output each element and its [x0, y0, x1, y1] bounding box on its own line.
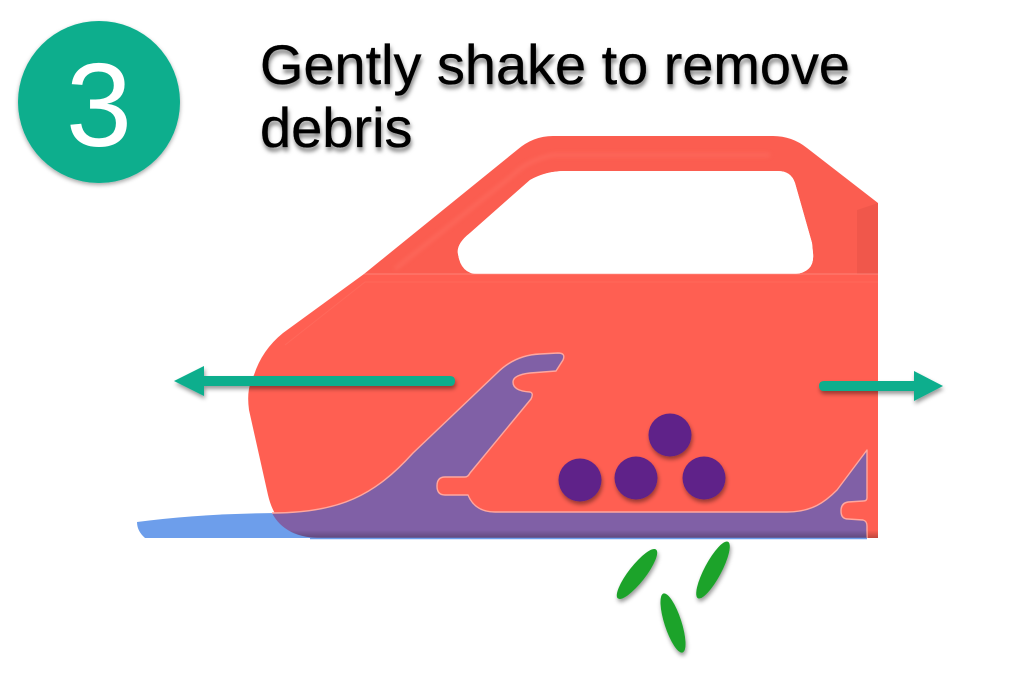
handle highlight bevel — [395, 155, 770, 269]
channel fill — [272, 353, 867, 538]
channel outline — [272, 353, 867, 538]
blue liquid spill — [137, 513, 320, 538]
step number badge — [18, 21, 180, 183]
red container — [248, 136, 878, 538]
channel bottom shade — [287, 530, 867, 538]
right arrow — [819, 371, 943, 401]
container body — [248, 274, 878, 538]
title — [260, 33, 850, 159]
hole mask — [458, 171, 813, 274]
handle inner top bevel — [560, 169, 778, 173]
purple particles — [558, 414, 726, 502]
right bottom edge shade — [867, 530, 878, 538]
title: debris — [260, 96, 413, 159]
purple channel overlap — [272, 353, 867, 538]
handle right face shading — [857, 203, 878, 274]
title: Gently shake to remove — [260, 33, 850, 96]
body inner highlight — [285, 282, 878, 345]
green debris — [611, 538, 736, 655]
container handle — [364, 136, 878, 274]
channel bottom line — [310, 538, 867, 540]
body seam — [364, 273, 878, 275]
step number badge: 3 — [66, 39, 132, 172]
left arrow — [174, 366, 455, 396]
